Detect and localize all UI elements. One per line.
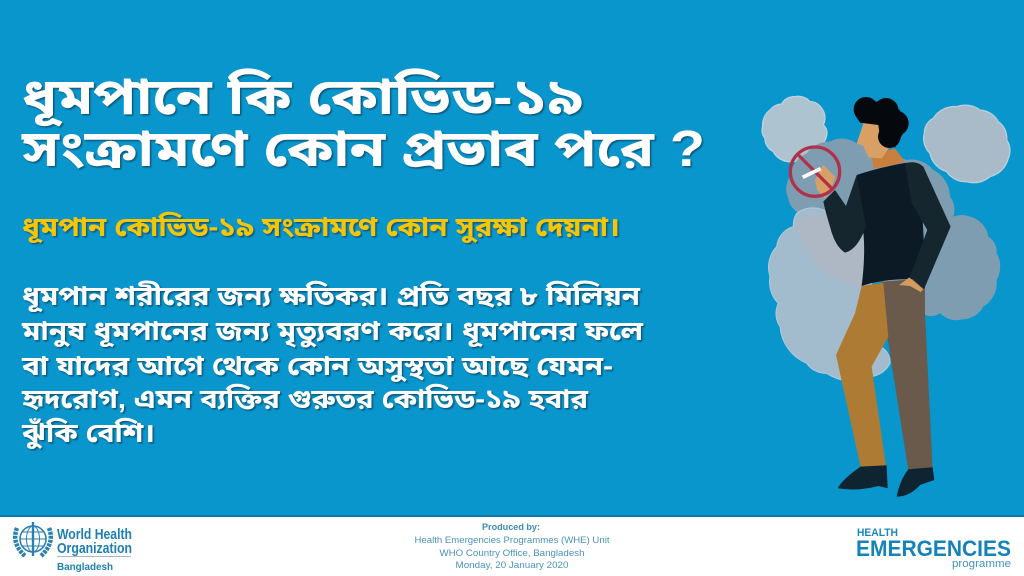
- smoke cloud: top right: [924, 105, 1010, 183]
- cigarette: [803, 169, 821, 177]
- hand in pocket: [899, 277, 923, 292]
- body text: হৃদরোগ, এমন ব্যক্তির গুরুতর কোভিড-১৯ হবার: [21, 383, 589, 414]
- title: [21, 68, 705, 177]
- illustration: man smoking with smoke clouds: [762, 96, 1010, 497]
- production credits: Produced by:: [482, 522, 540, 533]
- title: সংক্রামণে কোন প্রভাব পরে ?: [21, 120, 705, 177]
- body text: ঝুঁকি বেশি।: [21, 417, 155, 450]
- icon: WHO emblem: [15, 522, 51, 556]
- body text: ধূমপান শরীরের জন্য ক্ষতিকর। প্রতি বছর ৮ মিলিয়ন: [22, 280, 641, 313]
- body text: বা যাদের আগে থেকে কোন অসুস্থতা আছে যেমন-: [21, 351, 613, 383]
- body text: [21, 280, 644, 450]
- smoke cloud: top left: [762, 96, 827, 162]
- WHO name: World Health: [57, 526, 132, 543]
- footer band: [0, 515, 1024, 576]
- torso sweater: [857, 163, 926, 286]
- no smoking sign: [790, 147, 840, 196]
- hand: [815, 165, 835, 198]
- rear trouser leg: [882, 278, 933, 471]
- smoke cloud: back dark: [786, 139, 1000, 320]
- country name: Bangladesh: [57, 561, 113, 573]
- title: ধূমপানে কি কোভিড-১৯: [22, 68, 583, 127]
- hair: [854, 97, 909, 148]
- smoke cloud: large front: [768, 208, 890, 381]
- WHO logo: Organization: [57, 540, 132, 557]
- production credits: WHO Country Office, Bangladesh: [440, 548, 584, 559]
- subheading: yellow statement: ধূমপান কোভিড-১৯ সংক্রামণে কোন সুরক্ষা দেয়না।: [22, 211, 620, 244]
- logo rule: [57, 556, 131, 557]
- neck: [872, 148, 905, 168]
- smoke overlap patch: [795, 214, 865, 287]
- raised arm: [823, 175, 866, 253]
- WHO logo: [15, 522, 132, 573]
- production credits: Monday, 20 January 2020: [456, 560, 568, 571]
- front trouser leg: [836, 283, 888, 467]
- production credits: Health Emergencies Programmes (WHE) Unit: [414, 535, 610, 546]
- shoes: [838, 465, 888, 490]
- body text: মানুষ ধূমপানের জন্য মৃত্যুবরণ করে। ধূমপানের ফলে: [21, 316, 644, 348]
- arm on hip: [905, 162, 951, 289]
- production credits: [414, 522, 610, 571]
- Health Emergencies programme logo: EMERGENCIES: [856, 536, 1011, 561]
- Health Emergencies programme logo: programme: [952, 558, 1011, 570]
- Health Emergencies programme logo: HEALTH: [857, 527, 898, 539]
- Health Emergencies programme logo: [856, 527, 1011, 570]
- face: [857, 122, 890, 158]
